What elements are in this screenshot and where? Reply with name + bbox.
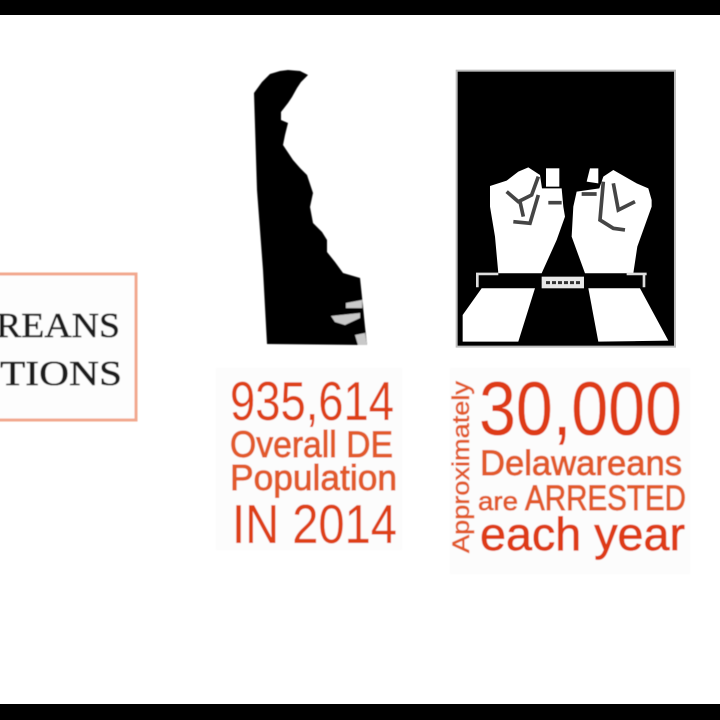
panel: handcuffed fists bbox=[457, 71, 675, 347]
arrest label line 1: Delawareans bbox=[480, 444, 682, 483]
right fist bbox=[572, 168, 652, 273]
text block: population bbox=[216, 368, 402, 555]
left fist bbox=[490, 167, 565, 273]
population label line 1: Overall DE bbox=[230, 424, 393, 465]
bottom black bar bbox=[0, 704, 720, 720]
handcuffs bbox=[477, 274, 647, 288]
top black bar bbox=[0, 0, 720, 15]
population year: IN 2014 bbox=[232, 493, 397, 555]
text block: arrests bbox=[448, 367, 690, 574]
icon: Delaware state silhouette bbox=[254, 70, 367, 345]
right forearm bbox=[588, 288, 668, 342]
population label line 2: Population bbox=[230, 457, 397, 498]
vertical qualifier: Approximately bbox=[448, 381, 475, 553]
arrest label line 3: each year bbox=[480, 508, 685, 560]
arrest label line 2: are bbox=[478, 486, 518, 516]
population figure: 935,614 bbox=[230, 370, 394, 432]
panel: title box (cropped) bbox=[0, 274, 136, 420]
text block: arrests: ARRESTED bbox=[525, 479, 686, 518]
arrest figure: 30,000 bbox=[479, 367, 682, 452]
left forearm bbox=[463, 288, 535, 342]
title line 2: TIONS bbox=[0, 354, 122, 393]
